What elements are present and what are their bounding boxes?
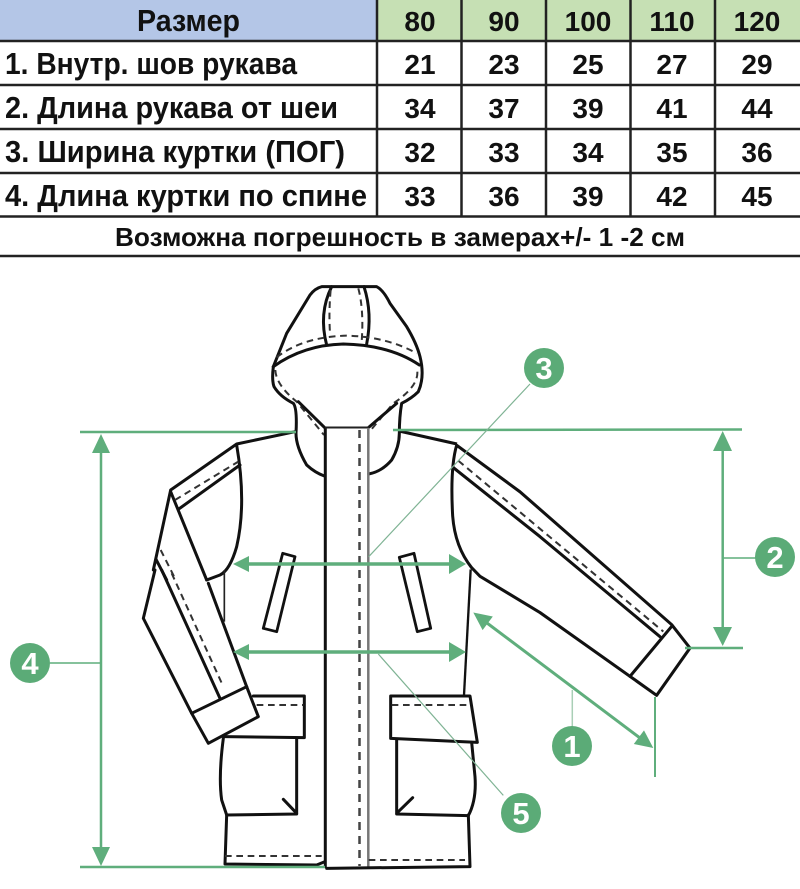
table row 1: 29 xyxy=(741,49,773,80)
table row 2: 44 xyxy=(741,93,773,124)
table header row: 110 xyxy=(649,6,695,37)
table header row: 90 xyxy=(488,6,520,37)
measure 1: inner sleeve seam xyxy=(473,612,655,777)
table row 3: 32 xyxy=(404,137,436,168)
table row 4: 36 xyxy=(488,181,520,212)
left zip pocket xyxy=(263,553,295,632)
table row 1: 1. Внутр. шов рукава xyxy=(5,46,298,81)
table row 2: 39 xyxy=(572,93,604,124)
right shoulder and sleeve xyxy=(452,445,690,695)
table row 4: 33 xyxy=(404,181,436,212)
table row 3: 35 xyxy=(656,137,688,168)
front placket and zipper xyxy=(325,428,369,868)
badge 1: 1 xyxy=(563,729,581,764)
size table xyxy=(0,0,800,256)
table header row: Размер xyxy=(137,3,240,38)
table header row xyxy=(0,0,800,41)
right zip pocket xyxy=(399,553,431,632)
left patch pocket xyxy=(220,696,304,815)
measure 3: chest width xyxy=(233,348,564,574)
jacket hem xyxy=(225,815,470,868)
badge 5 xyxy=(501,793,541,833)
table row 2: 2. Длина рукава от шеи xyxy=(5,90,338,125)
right patch pocket xyxy=(391,696,477,816)
hood and collar xyxy=(273,287,422,476)
table row 2: 37 xyxy=(488,93,520,124)
table header row: 100 xyxy=(565,6,611,37)
measure 4: jacket length xyxy=(10,432,325,867)
table row 1: 23 xyxy=(488,49,520,80)
table row 3: 33 xyxy=(488,137,520,168)
table header row: 80 xyxy=(404,6,436,37)
jacket line drawing xyxy=(143,287,690,868)
table row 1: 21 xyxy=(404,49,436,80)
table row 2: 34 xyxy=(404,93,436,124)
badge 3 xyxy=(524,348,564,388)
table row 2: 41 xyxy=(656,93,688,124)
table header row: 120 xyxy=(734,6,780,37)
right shoulder seam xyxy=(399,431,457,444)
measure 2: sleeve length from neck xyxy=(393,430,795,648)
badge 2 xyxy=(755,537,795,577)
table footnote: Возможна погрешность в замерах+/- 1 -2 см xyxy=(115,222,685,252)
left lower sleeve and cuff xyxy=(143,570,258,743)
badge 2: 2 xyxy=(766,540,784,575)
badge 4: 4 xyxy=(21,646,39,681)
table row 3: 34 xyxy=(572,137,604,168)
left shoulder and sleeve xyxy=(153,432,295,580)
table row 1: 27 xyxy=(656,49,688,80)
table row 3: 3. Ширина куртки (ПОГ) xyxy=(5,134,345,169)
badge 5: 5 xyxy=(512,796,530,831)
badge 3: 3 xyxy=(535,351,553,386)
table row 3: 36 xyxy=(741,137,773,168)
table row 1 xyxy=(5,46,773,81)
table row 2 xyxy=(5,90,773,125)
table row 4: 39 xyxy=(572,181,604,212)
table row 3 xyxy=(5,134,773,169)
table row 4: 42 xyxy=(656,181,688,212)
table row 4 xyxy=(5,178,773,213)
badge 1 xyxy=(552,726,592,766)
table row 1: 25 xyxy=(572,49,604,80)
table row 4: 4. Длина куртки по спине xyxy=(5,178,367,213)
table row 4: 45 xyxy=(741,181,773,212)
badge 4 xyxy=(10,643,50,683)
measure 5: waist width xyxy=(233,642,541,833)
